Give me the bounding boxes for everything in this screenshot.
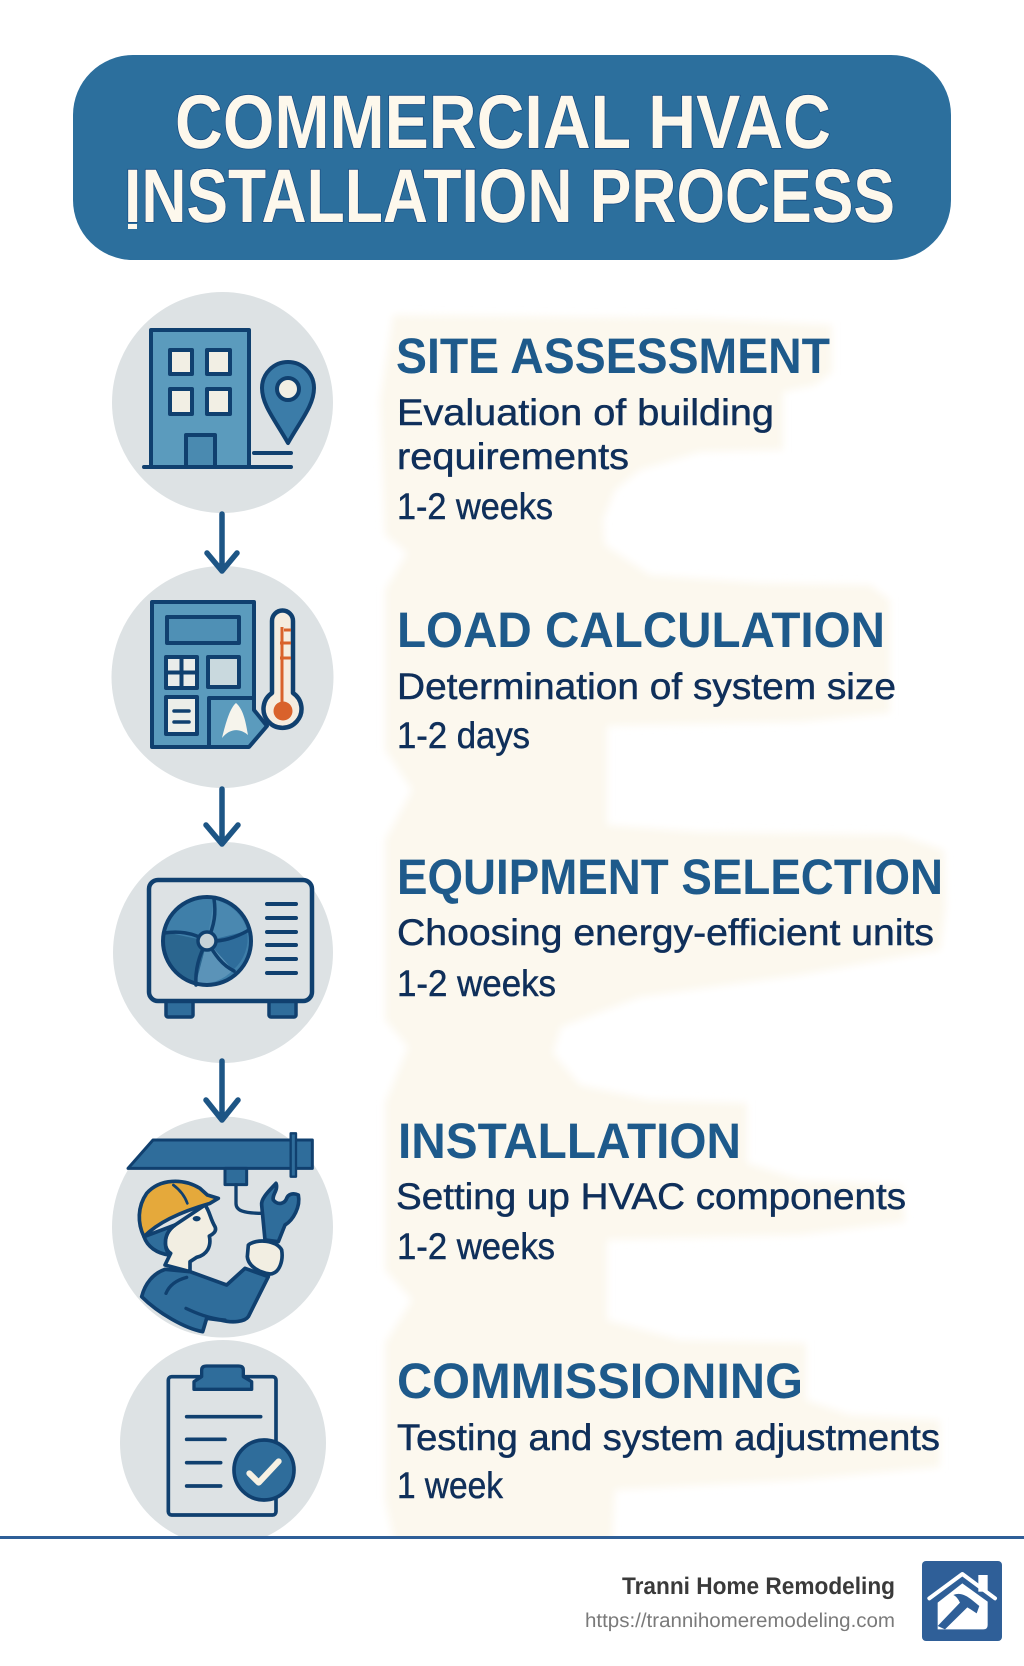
arrow 2 to 3 bbox=[206, 789, 238, 844]
description: Determination of system size bbox=[397, 666, 896, 707]
description bbox=[397, 392, 774, 477]
title banner bbox=[73, 55, 951, 260]
description: Evaluation of building bbox=[397, 392, 774, 433]
step 4 icon: technician at duct bbox=[112, 1116, 333, 1338]
step 3 icon: outdoor HVAC unit bbox=[113, 842, 333, 1063]
step 5 text bbox=[397, 1353, 940, 1506]
heading: commissioning: COMMISSIONING bbox=[397, 1353, 803, 1409]
duration: 1-2 weeks bbox=[397, 963, 556, 1004]
description: Setting up HVAC components bbox=[396, 1176, 906, 1217]
website url: https://trannihomeremodeling.com bbox=[585, 1610, 895, 1632]
footer bbox=[0, 1536, 1024, 1666]
description: requirements bbox=[397, 436, 629, 477]
heading: installation: INSTALLATION bbox=[398, 1113, 741, 1169]
title line 1: COMMERCIAL HVAC bbox=[175, 80, 831, 165]
heading: equipment selection: EQUIPMENT SELECTION bbox=[397, 849, 943, 905]
cream text backdrop bbox=[380, 315, 946, 1545]
description: Testing and system adjustments bbox=[397, 1417, 940, 1458]
logo: house with hammer bbox=[922, 1561, 1002, 1641]
heading: load calculation: LOAD CALCULATION bbox=[397, 602, 885, 658]
step 4 text bbox=[396, 1113, 906, 1267]
duration: 1-2 weeks bbox=[397, 1226, 555, 1267]
step 5 icon: clipboard with check bbox=[120, 1340, 326, 1546]
brand name: Tranni Home Remodeling bbox=[622, 1573, 895, 1600]
step 2 text bbox=[397, 602, 896, 756]
duration: 1-2 days bbox=[397, 715, 530, 756]
arrow 1 to 2 bbox=[207, 514, 237, 571]
duration: 1 week bbox=[397, 1465, 503, 1506]
duration: 1-2 weeks bbox=[397, 486, 553, 527]
step 1 text bbox=[396, 328, 830, 527]
step 3 text bbox=[397, 849, 943, 1004]
step 2 icon: calculator and thermometer bbox=[112, 566, 334, 788]
arrow 3 to 4 bbox=[206, 1061, 238, 1120]
description: Choosing energy-efficient units bbox=[397, 912, 934, 953]
step 1 icon: building and location pin bbox=[112, 292, 333, 513]
heading: site assessment: SITE ASSESSMENT bbox=[396, 328, 830, 384]
